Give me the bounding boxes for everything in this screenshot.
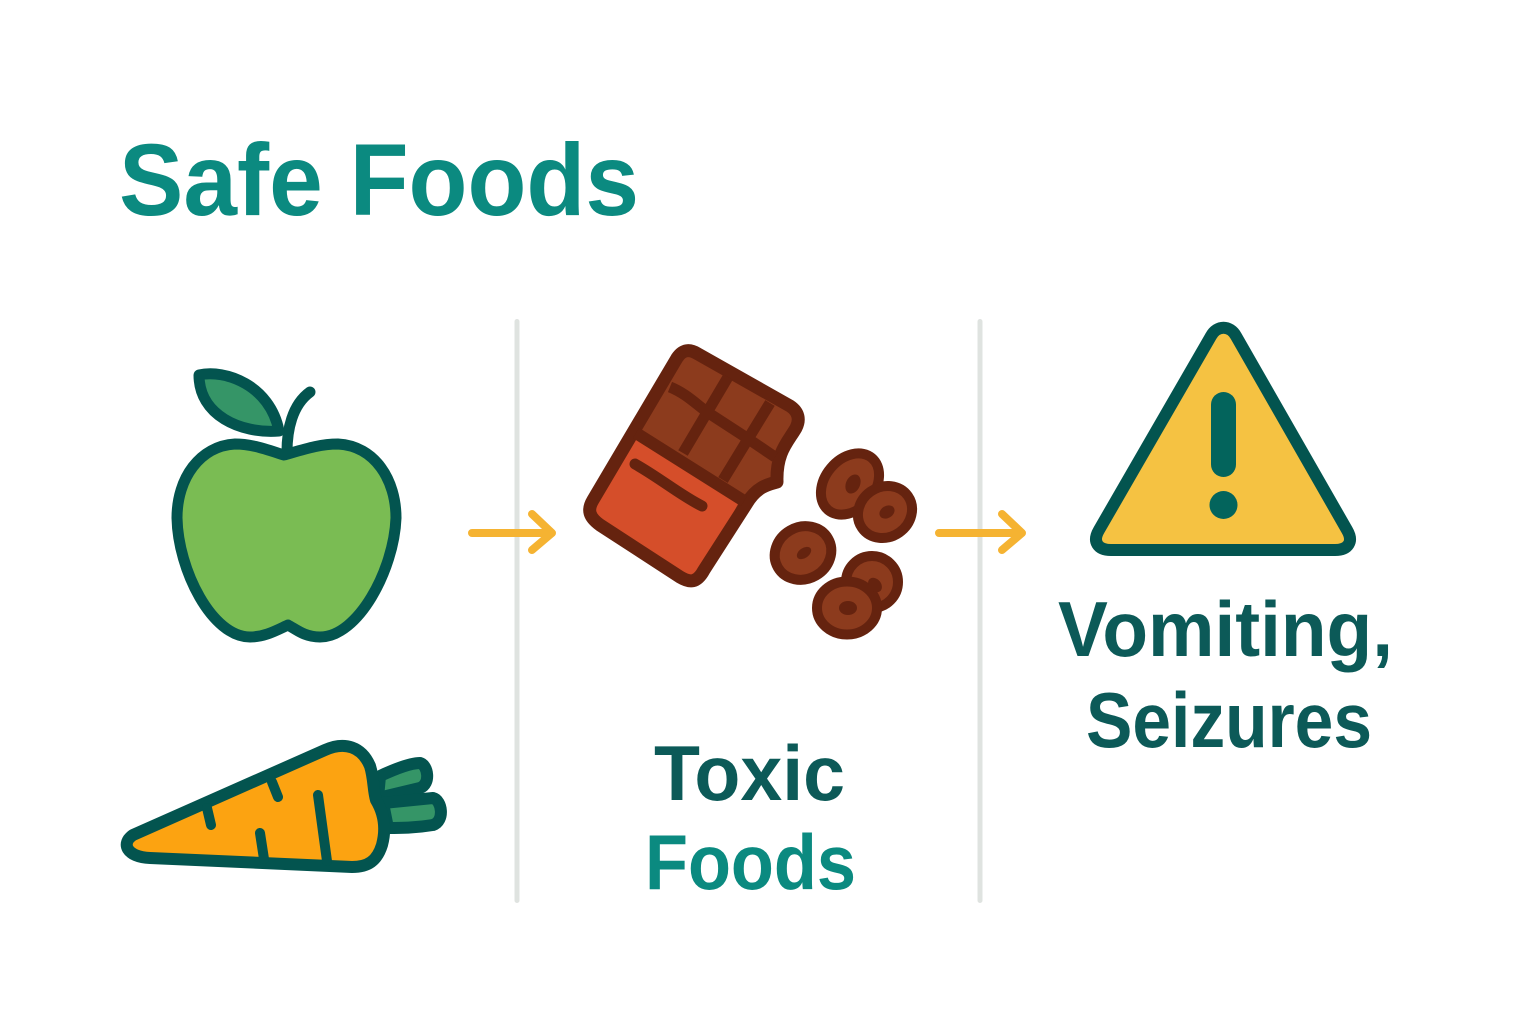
icon: chocolate bar bbox=[590, 351, 798, 581]
arrow: safe to toxic bbox=[472, 514, 552, 550]
label: Toxic Foods: Toxic bbox=[654, 729, 845, 817]
arrow: toxic to symptoms bbox=[939, 514, 1022, 550]
title: Safe Foods: Safe Foods bbox=[119, 123, 639, 237]
label: Toxic Foods: Foods bbox=[645, 818, 856, 906]
label: Vomiting, Seizures: Seizures bbox=[1086, 676, 1372, 764]
label: Toxic Foods bbox=[645, 729, 856, 906]
icon: warning triangle bbox=[1096, 328, 1350, 550]
icon: chocolate chips bbox=[765, 442, 922, 634]
icon: green apple bbox=[177, 374, 396, 637]
label: Vomiting, Seizures bbox=[1058, 585, 1393, 764]
icon: carrot bbox=[127, 746, 441, 867]
label: Vomiting, Seizures: Vomiting, bbox=[1058, 585, 1393, 673]
